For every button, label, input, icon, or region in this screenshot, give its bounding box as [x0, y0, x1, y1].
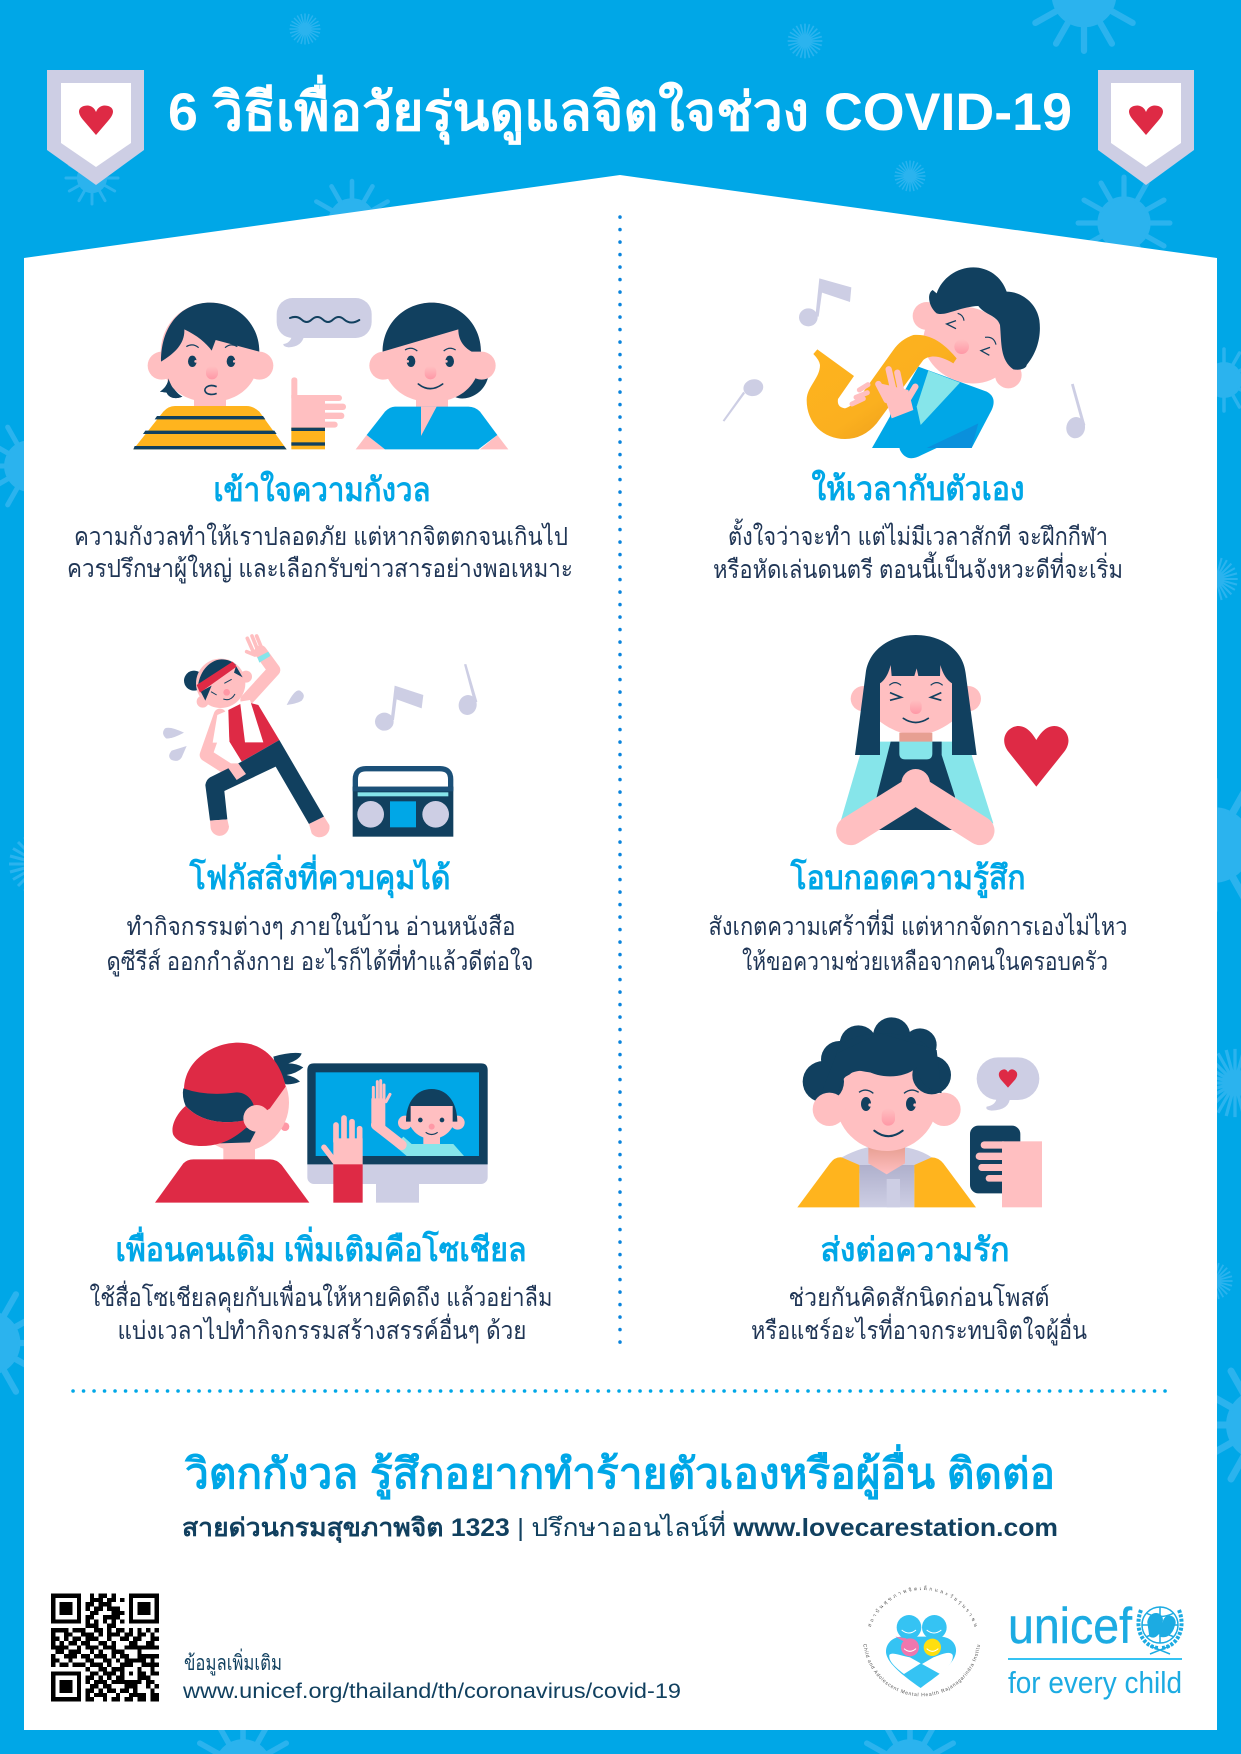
- panel: focus on what you can control: [106, 636, 534, 977]
- more information text: www.unicef.org/thailand/th/coronavirus/covid-19: [182, 1680, 681, 1703]
- body text: [90, 1280, 552, 1345]
- thumbs hand: [291, 377, 346, 449]
- panel: time for yourself: [713, 267, 1123, 584]
- body text: [751, 1283, 1087, 1346]
- body text: ช่วยกันคิดสักนิดก่อนโพสต์: [788, 1283, 1050, 1312]
- body text: [106, 912, 534, 977]
- body text: หรือแชร์อะไรที่อาจกระทบจิตใจผู้อื่น: [751, 1313, 1087, 1346]
- body text: ควรปรึกษาผู้ใหญ่ และเลือกรับข่าวสารอย่างพอเหมาะ: [67, 554, 573, 584]
- waving hand: [324, 1118, 363, 1203]
- unicef emblem: [1138, 1607, 1182, 1654]
- title: 6 วิธีเพื่อวัยรุ่นดูแลจิตใจช่วง COVID-19: [168, 74, 1072, 145]
- person on screen: [371, 1081, 465, 1156]
- panel: understand worry: [67, 298, 573, 584]
- sweat drops: [163, 690, 304, 761]
- red heart: [1004, 726, 1068, 787]
- heading: เพื่อนคนเดิม เพิ่มเติมคือโซเชียล: [116, 1226, 526, 1268]
- more information text: ข้อมูลเพิ่มเติม: [184, 1648, 282, 1676]
- saxophone: [807, 335, 957, 439]
- badge right: [1098, 70, 1194, 185]
- hotline contact: สายด่วนกรมสุขภาพจิต 1323 | ปรึกษาออนไลน์ที่ www.lovecarestation.com: [182, 1510, 1058, 1544]
- panel: pass on love: [751, 1017, 1087, 1346]
- body text: สังเกตความเศร้าที่มี แต่หากจัดการเองไม่ไหว: [708, 909, 1128, 941]
- header: [47, 70, 1194, 185]
- body text: แบ่งเวลาไปทำกิจกรรมสร้างสรรค์อื่นๆ ด้วย: [118, 1313, 526, 1345]
- person from behind: [155, 1043, 309, 1203]
- family heart: [886, 1615, 956, 1688]
- heading: เข้าใจความกังวล: [214, 470, 430, 508]
- heading: ให้เวลากับตัวเอง: [812, 469, 1024, 507]
- badge left: [47, 70, 144, 185]
- girl: [840, 635, 993, 831]
- body text: ใช้สื่อโซเชียลคุยกับเพื่อนให้หายคิดถึง แล้วอย่าลืม: [90, 1280, 552, 1313]
- more information text: [182, 1648, 681, 1703]
- body text: ทำกิจกรรมต่างๆ ภายในบ้าน อ่านหนังสือ: [126, 912, 516, 941]
- logo: unicef: [1008, 1598, 1182, 1700]
- body text: ความกังวลทำให้เราปลอดภัย แต่หากจิตตกจนเกินไป: [74, 522, 568, 551]
- body text: [713, 518, 1123, 584]
- round seal text: สถาบันสุขภาพจิตเด็กและวัยรุ่นราชนครินทร์: [868, 1586, 977, 1627]
- radio: [353, 769, 453, 837]
- speech bubble: [277, 298, 372, 347]
- illustration: exercising girl and radio: [163, 636, 479, 837]
- round seal text: [863, 1586, 980, 1696]
- heading: ส่งต่อความรัก: [820, 1231, 1010, 1268]
- horizontal dotted divider: [73, 1389, 1170, 1393]
- body text: [708, 909, 1128, 976]
- round seal text: Child and Adolescent Mental Health Rajanagarindra Institute: [863, 1644, 980, 1696]
- phone and hand: [970, 1126, 1042, 1207]
- illustration: girl hugging herself with heart: [840, 635, 1068, 831]
- vertical dotted divider: [618, 217, 622, 1346]
- heading: โฟกัสสิ่งที่ควบคุมได้: [189, 854, 450, 899]
- illustration: boy with phone: [797, 1017, 1042, 1207]
- monitor: [307, 1063, 488, 1203]
- music notes: [723, 278, 1087, 440]
- hands: [852, 369, 915, 418]
- illustration: two friends talking: [133, 298, 508, 449]
- musician: [872, 267, 1040, 458]
- boy with striped shirt: [133, 303, 287, 449]
- panel: old friends, more social: [90, 1043, 552, 1345]
- hotline callout: [182, 1444, 1058, 1544]
- panel: embrace feelings: [708, 635, 1128, 976]
- for every child: for every child: [1008, 1665, 1182, 1700]
- music notes: [375, 664, 479, 731]
- exercising girl: [184, 636, 330, 837]
- body text: ตั้งใจว่าจะทำ แต่ไม่มีเวลาสักที จะฝึกกีฬา: [728, 518, 1108, 551]
- body text: หรือหัดเล่นดนตรี ตอนนี้เป็นจังหวะดีที่จะเริ่ม: [713, 551, 1123, 584]
- body text: ดูซีรีส์ ออกกำลังกาย อะไรก็ได้ที่ทำแล้วดีต่อใจ: [106, 944, 534, 977]
- heart speech bubble: [977, 1057, 1039, 1111]
- curly haired boy: [797, 1017, 976, 1207]
- hotline heading: วิตกกังวล รู้สึกอยากทำร้ายตัวเองหรือผู้อื่น ติดต่อ: [184, 1444, 1055, 1500]
- QR code: [51, 1594, 159, 1702]
- illustration: saxophone player: [723, 267, 1087, 458]
- heading: โอบกอดความรู้สึก: [790, 858, 1026, 899]
- body text: [67, 522, 573, 584]
- unicef divider: [1008, 1658, 1182, 1660]
- logo: child and adolescent mental health institute: [863, 1586, 980, 1696]
- illustration: video call: [155, 1043, 488, 1203]
- body text: ให้ขอความช่วยเหลือจากคนในครอบครัว: [742, 947, 1108, 976]
- unicef wordmark: unicef: [1008, 1598, 1132, 1654]
- girl with blue shirt: [356, 303, 508, 449]
